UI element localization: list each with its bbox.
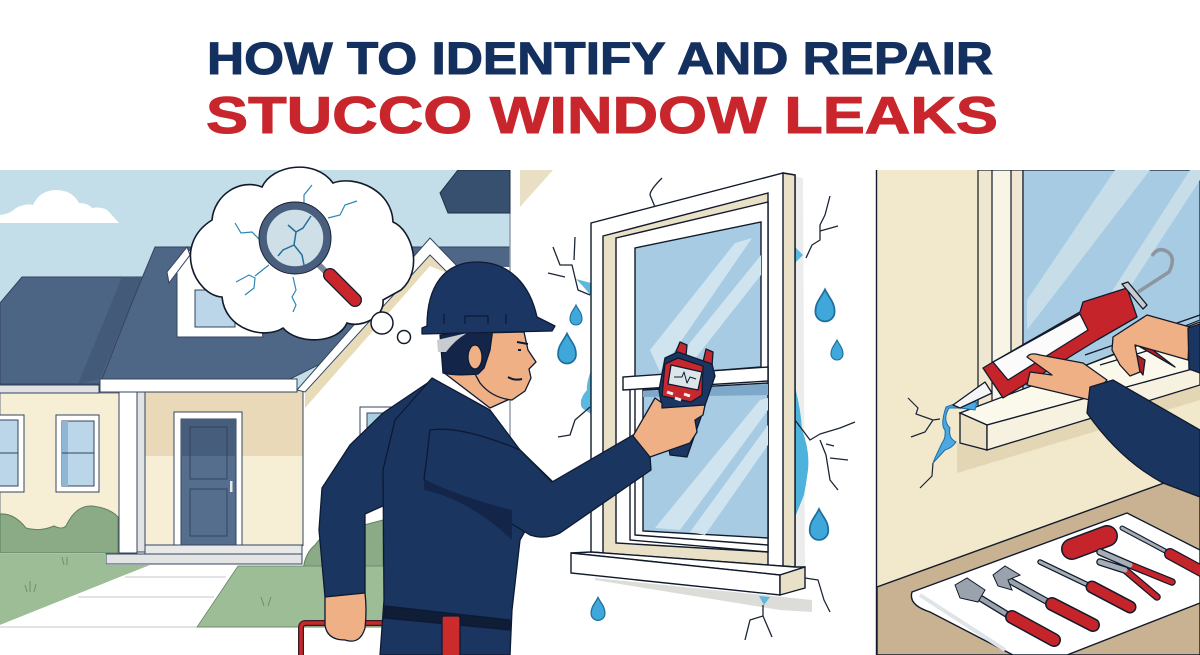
sill shadow — [957, 385, 1200, 473]
wall divider — [509, 213, 511, 655]
lens cracks — [278, 216, 311, 265]
upper hand — [1112, 315, 1190, 376]
sill shadow — [595, 578, 812, 612]
repair wall — [877, 170, 1200, 655]
water drops — [558, 289, 843, 620]
worker neck — [443, 370, 512, 408]
worker belt — [384, 606, 510, 630]
tool cart handle — [301, 623, 385, 655]
worker torso — [380, 378, 553, 655]
bubble circle small — [398, 330, 410, 344]
leak upper right — [795, 247, 803, 263]
eave cream — [520, 170, 553, 207]
left window one — [0, 415, 24, 492]
meter trace — [674, 372, 696, 383]
red belt tag — [442, 616, 460, 655]
bubble cracks — [235, 185, 357, 312]
hands and sleeve — [1027, 315, 1200, 497]
left fascia — [0, 385, 99, 393]
wrench two — [993, 566, 1093, 625]
gun frame — [983, 288, 1137, 398]
worker right arm — [424, 429, 651, 537]
grass tufts — [25, 557, 271, 606]
dormer trim — [167, 247, 190, 283]
window trim white — [992, 170, 1011, 410]
door upper panel — [190, 427, 227, 479]
window side cream — [783, 173, 795, 567]
lower rail shade — [643, 384, 768, 397]
sill top — [960, 322, 1200, 425]
floor — [877, 470, 1200, 655]
drop three — [815, 289, 835, 321]
worker face — [470, 332, 536, 400]
cartridge — [993, 314, 1088, 380]
leak sill — [759, 596, 770, 605]
wall background — [511, 170, 877, 655]
worker right hand — [633, 398, 705, 457]
worker hand on cart — [325, 593, 366, 641]
door lower panel — [190, 489, 227, 536]
left wall — [0, 392, 118, 530]
worker left arm — [319, 380, 432, 597]
dormer window — [195, 290, 235, 327]
tool towel — [911, 513, 1200, 655]
porch fascia — [100, 379, 297, 392]
side window — [360, 406, 392, 435]
magnifier lens — [263, 206, 327, 270]
leak upper left — [576, 279, 591, 296]
lower glass — [643, 383, 768, 538]
sill top — [571, 552, 805, 575]
drop two — [558, 334, 576, 364]
window outer frame — [591, 173, 795, 567]
pliers — [1100, 552, 1172, 597]
title line one: HOW TO IDENTIFY AND REPAIR — [207, 33, 993, 84]
hat strap — [437, 333, 467, 352]
porch wall — [145, 456, 303, 546]
meter buttons — [667, 392, 690, 400]
towel fold — [920, 595, 1005, 650]
panel divider — [876, 170, 878, 655]
drop one — [570, 305, 582, 325]
left lawn — [0, 554, 150, 625]
sill left end — [960, 413, 987, 450]
repair glass — [1023, 170, 1200, 390]
upper glass — [635, 222, 761, 377]
repair cracks — [908, 398, 940, 488]
upper right roof — [100, 247, 510, 379]
left roof — [0, 277, 142, 384]
sky — [0, 170, 510, 392]
screwdriver one — [1040, 562, 1130, 607]
lower sash edges — [630, 390, 768, 552]
title — [206, 33, 998, 145]
eave corner — [440, 170, 510, 213]
panel: caulking repair — [877, 170, 1200, 655]
panel: stucco wall — [440, 170, 877, 655]
magnifier handle — [318, 264, 355, 300]
thought bubble — [190, 167, 414, 344]
title line two: STUCCO WINDOW LEAKS — [206, 87, 998, 145]
lower hand — [1027, 354, 1107, 400]
porch wall edge — [302, 392, 304, 546]
window opening — [603, 193, 768, 565]
lower sleeve — [1087, 380, 1200, 497]
gable cream band — [305, 256, 447, 408]
voltage meter — [659, 342, 715, 457]
sill — [960, 315, 1200, 450]
worker hair — [440, 328, 493, 375]
window sash — [616, 202, 768, 552]
hard hat — [422, 262, 555, 334]
meter probes — [675, 342, 713, 366]
upper sleeve — [1188, 324, 1200, 373]
porch step upper — [145, 545, 302, 554]
meter body — [659, 352, 715, 457]
screwdriver two — [1122, 528, 1200, 573]
wrench one — [955, 578, 1054, 640]
window — [571, 173, 805, 595]
repair glass highlights — [1027, 170, 1200, 330]
left roof shade — [78, 277, 142, 384]
bubble circle large — [371, 312, 393, 334]
gable white trim — [297, 238, 458, 392]
sash rail — [623, 367, 768, 390]
house — [0, 237, 510, 564]
drop five — [810, 509, 828, 540]
left window two — [56, 415, 99, 492]
drop six — [591, 597, 605, 620]
upper glass highlights — [650, 238, 761, 372]
lower glass highlights — [655, 398, 768, 535]
sky cloud — [0, 190, 119, 223]
right side wall — [304, 256, 510, 430]
dormer — [177, 250, 263, 337]
trigger — [1120, 337, 1175, 375]
sill front — [987, 367, 1200, 450]
column shade — [137, 392, 145, 552]
sill end — [780, 567, 805, 595]
wall cracks — [548, 178, 855, 640]
walkway joints — [0, 577, 383, 627]
porch step lower — [106, 554, 302, 564]
window right shadow — [795, 176, 805, 568]
door — [181, 419, 236, 545]
sill front — [571, 553, 780, 595]
roller — [1072, 536, 1107, 549]
sill grooves — [1085, 315, 1200, 365]
window trim — [978, 170, 1023, 410]
tools — [955, 528, 1200, 640]
meter screen — [668, 365, 702, 390]
rod and hook — [1138, 250, 1172, 292]
lens rim outline — [259, 202, 331, 274]
door shade — [181, 419, 236, 456]
right bush — [303, 520, 384, 566]
sleeve shade — [424, 480, 512, 540]
walkway — [0, 565, 150, 625]
worker eye and mouth — [508, 342, 528, 380]
worker ear — [468, 345, 482, 369]
bubble cloud — [190, 167, 414, 340]
blue caulk crack — [933, 402, 977, 463]
right lawn — [197, 566, 390, 627]
door frame — [174, 412, 242, 545]
hard hat detail — [444, 314, 506, 324]
porch wall shaded — [145, 392, 303, 456]
column — [119, 392, 137, 553]
leak left — [581, 370, 591, 414]
drop four — [831, 340, 843, 360]
hedge — [0, 506, 118, 553]
leak right — [795, 387, 808, 517]
tool cart handle outline — [301, 623, 385, 655]
nozzle — [953, 382, 992, 408]
worker — [301, 262, 715, 655]
caulk gun — [953, 250, 1175, 408]
door handle — [230, 481, 232, 492]
panel: house exterior — [0, 170, 510, 655]
rear plate — [1122, 282, 1147, 309]
meter face — [662, 358, 703, 402]
